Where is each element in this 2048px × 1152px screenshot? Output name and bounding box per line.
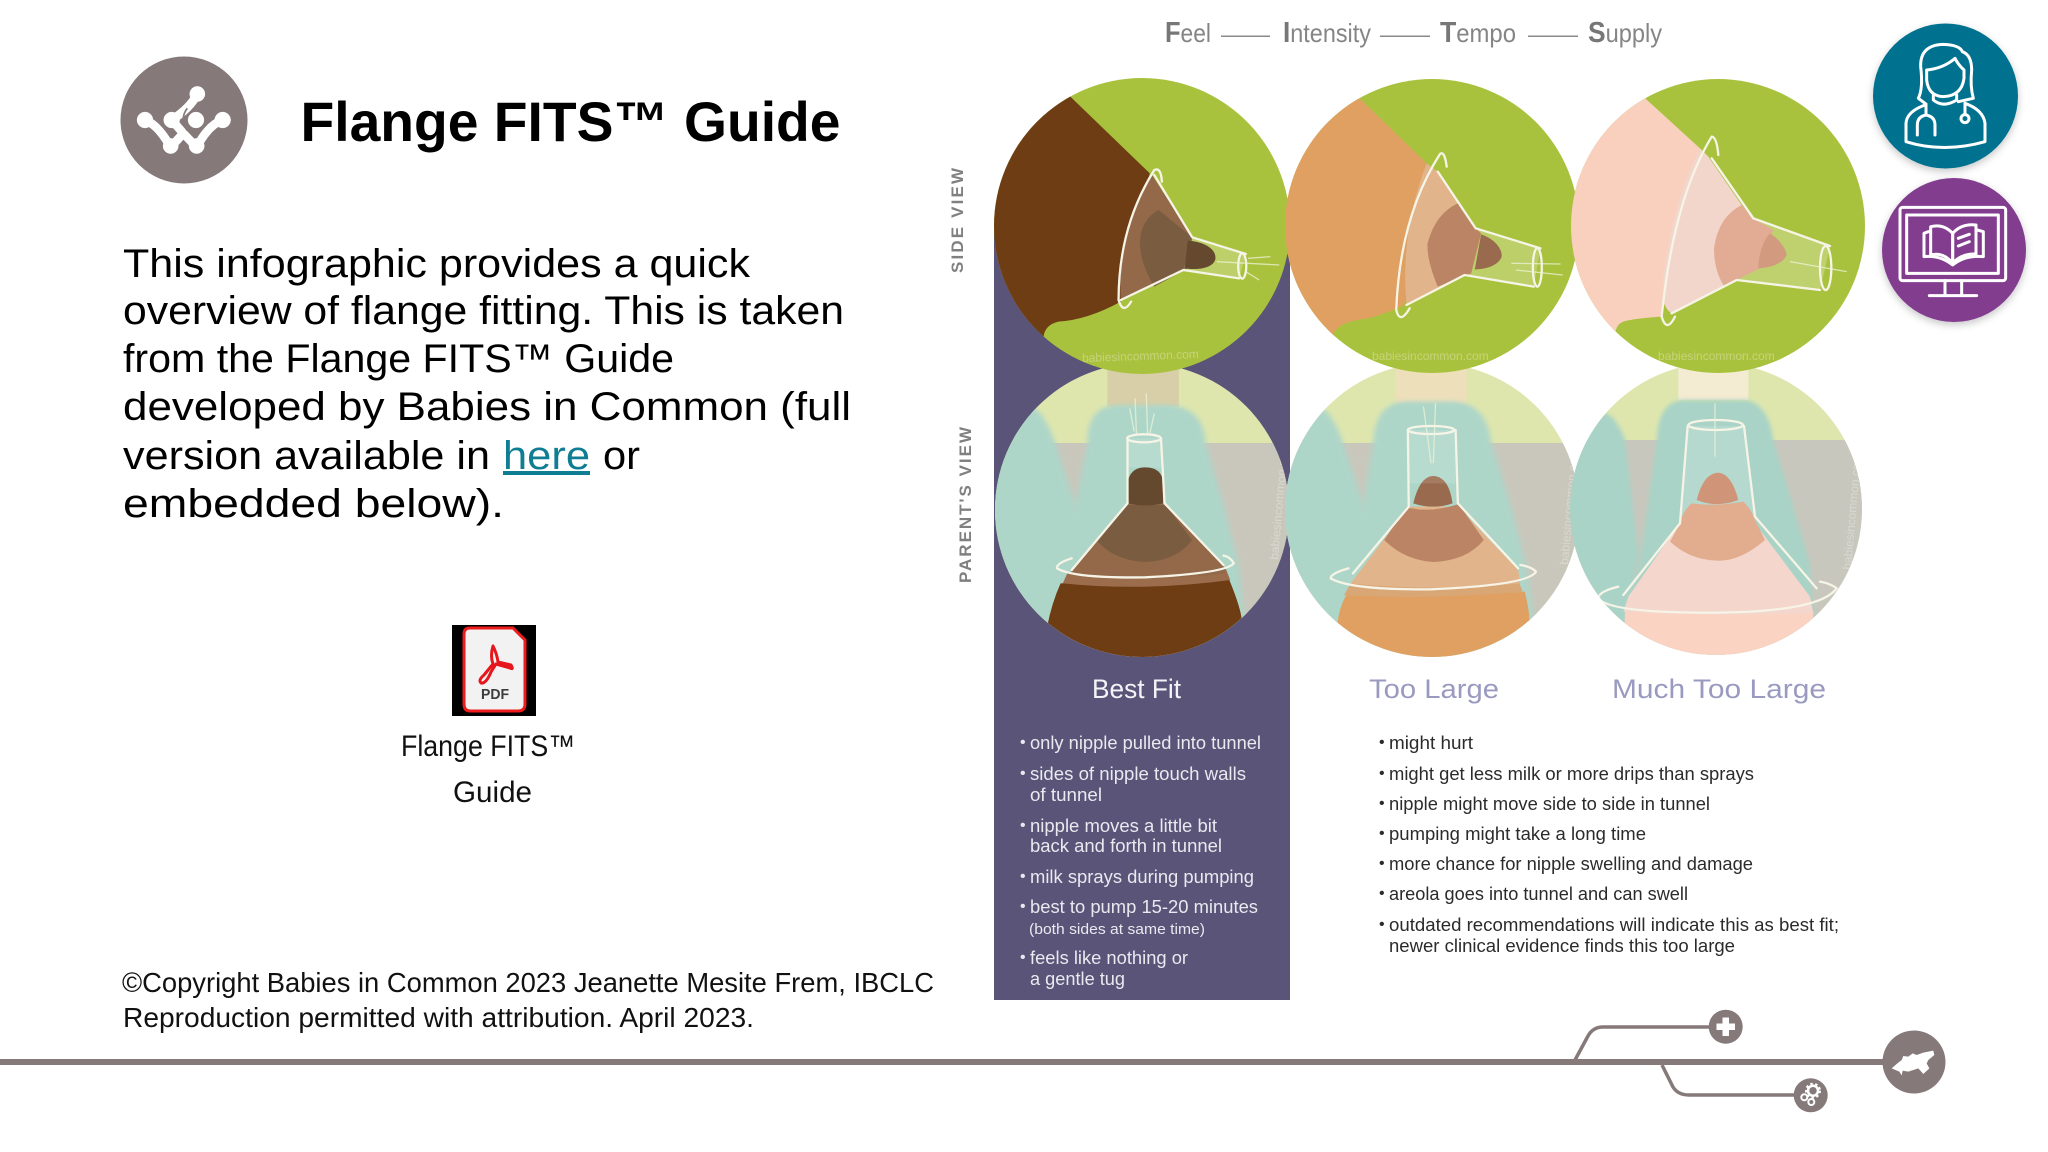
title: Flange FITS™ Guide xyxy=(300,90,840,153)
PDF caption: Guide xyxy=(453,776,532,809)
text block: introduction: here xyxy=(503,434,590,478)
list: best fit characteristics xyxy=(1020,732,1261,989)
illustration: parent's view too large: babiesincommon.com xyxy=(1557,448,1581,565)
illustration: parent's view much too large: babiesincommon.com xyxy=(1840,453,1864,570)
list: best fit characteristics: • xyxy=(1020,898,1026,915)
PDF caption xyxy=(401,730,575,809)
illustration: parent's view best fit: babiesincommon.com xyxy=(1267,443,1291,560)
list: too large characteristics: outdated recommendations will indicate this as best fit; xyxy=(1389,914,1839,935)
illustration: side view too large xyxy=(1285,79,1575,373)
heading: Feel Intensity Tempo Supply: Feel xyxy=(1165,17,1211,49)
list: too large characteristics: might hurt xyxy=(1389,732,1473,753)
text block: introduction: developed by Babies in Common (full xyxy=(123,385,851,429)
illustration: parent's view too large xyxy=(1285,368,1574,657)
list: best fit characteristics: milk sprays during pumping xyxy=(1030,866,1254,887)
text block: introduction: version available in xyxy=(123,434,490,478)
illustration: side view best fit xyxy=(994,78,1288,374)
list: best fit characteristics: best to pump 15-20 minutes xyxy=(1030,896,1258,917)
list: best fit characteristics: • xyxy=(1020,817,1026,834)
list: best fit characteristics: • xyxy=(1020,868,1026,885)
text block: introduction: embedded below). xyxy=(123,482,504,526)
heading: Feel Intensity Tempo Supply xyxy=(1165,17,1662,49)
list: too large characteristics: • xyxy=(1379,825,1385,842)
list: best fit characteristics: back and forth in tunnel xyxy=(1030,835,1222,856)
list: too large characteristics: • xyxy=(1379,916,1385,933)
list: too large characteristics: areola goes into tunnel and can swell xyxy=(1389,883,1688,904)
list: best fit characteristics: • xyxy=(1020,734,1026,751)
text block: introduction: or xyxy=(603,434,640,478)
list: best fit characteristics: of tunnel xyxy=(1030,784,1102,805)
icon: plus node xyxy=(1709,1010,1743,1044)
list: too large characteristics: newer clinical evidence finds this too large xyxy=(1389,935,1735,956)
panel: best fit background xyxy=(994,226,1290,1000)
copyright note xyxy=(122,967,934,1033)
column heading: too large: Too Large xyxy=(1369,674,1499,704)
list: too large characteristics xyxy=(1379,732,1839,956)
row label: parent's view: PARENT'S VIEW xyxy=(956,426,975,583)
icon: clinician xyxy=(1873,24,2018,168)
list: too large characteristics: • xyxy=(1379,855,1385,872)
icon: gears node xyxy=(1794,1078,1828,1112)
list: too large characteristics: • xyxy=(1379,734,1385,751)
illustration: side view much too large xyxy=(1560,67,1865,373)
list: too large characteristics: might get less milk or more drips than sprays xyxy=(1389,763,1754,784)
list: best fit characteristics: • xyxy=(1020,949,1026,966)
heading: Feel Intensity Tempo Supply: Tempo xyxy=(1440,17,1516,49)
column heading: much too large: Much Too Large xyxy=(1612,674,1826,704)
copyright note: Reproduction permitted with attribution. April 2023. xyxy=(123,1002,754,1033)
list: best fit characteristics: • xyxy=(1020,765,1026,782)
text block: introduction: This infographic provides a quick xyxy=(123,242,751,286)
icon: PDF file xyxy=(452,625,536,716)
text block: introduction: overview of flange fitting. This is taken xyxy=(123,289,844,333)
list: best fit characteristics: only nipple pulled into tunnel xyxy=(1030,732,1261,753)
heading: Feel Intensity Tempo Supply: Intensity xyxy=(1283,17,1371,49)
list: too large characteristics: • xyxy=(1379,765,1385,782)
footer timeline xyxy=(0,1010,1946,1112)
icon: online book monitor xyxy=(1882,178,2026,322)
list: too large characteristics: • xyxy=(1379,885,1385,902)
row label: side view: SIDE VIEW xyxy=(948,167,967,273)
list: best fit characteristics: nipple moves a little bit xyxy=(1030,815,1217,836)
illustration: parent's view much too large xyxy=(1570,368,1862,655)
list: best fit characteristics: (both sides at same time) xyxy=(1029,921,1205,938)
list: too large characteristics: • xyxy=(1379,795,1385,812)
column heading: best fit: Best Fit xyxy=(1092,674,1181,704)
list: too large characteristics: more chance for nipple swelling and damage xyxy=(1389,853,1753,874)
text block: introduction xyxy=(123,242,851,526)
list: best fit characteristics: a gentle tug xyxy=(1030,968,1125,989)
list: too large characteristics: pumping might take a long time xyxy=(1389,823,1646,844)
illustration: side view much too large: babiesincommon.com xyxy=(1658,349,1775,363)
text block: introduction: from the Flange FITS™ Guide xyxy=(123,337,674,381)
PDF caption: Flange FITS™ xyxy=(401,730,575,763)
illustration: side view too large: babiesincommon.com xyxy=(1372,349,1489,363)
list: too large characteristics: nipple might move side to side in tunnel xyxy=(1389,793,1710,814)
icon: organisation logo xyxy=(120,56,248,184)
list: best fit characteristics: sides of nipple touch walls xyxy=(1030,763,1246,784)
illustration: side view best fit: babiesincommon.com xyxy=(1082,347,1199,365)
icon: map node xyxy=(1882,1030,1946,1094)
icon: PDF file: PDF xyxy=(481,686,509,703)
copyright note: ©Copyright Babies in Common 2023 Jeanette Mesite Frem, IBCLC xyxy=(122,967,934,998)
list: best fit characteristics: feels like nothing or xyxy=(1030,947,1188,968)
illustration: parent's view best fit xyxy=(995,368,1287,657)
heading: Feel Intensity Tempo Supply: Supply xyxy=(1588,17,1662,49)
